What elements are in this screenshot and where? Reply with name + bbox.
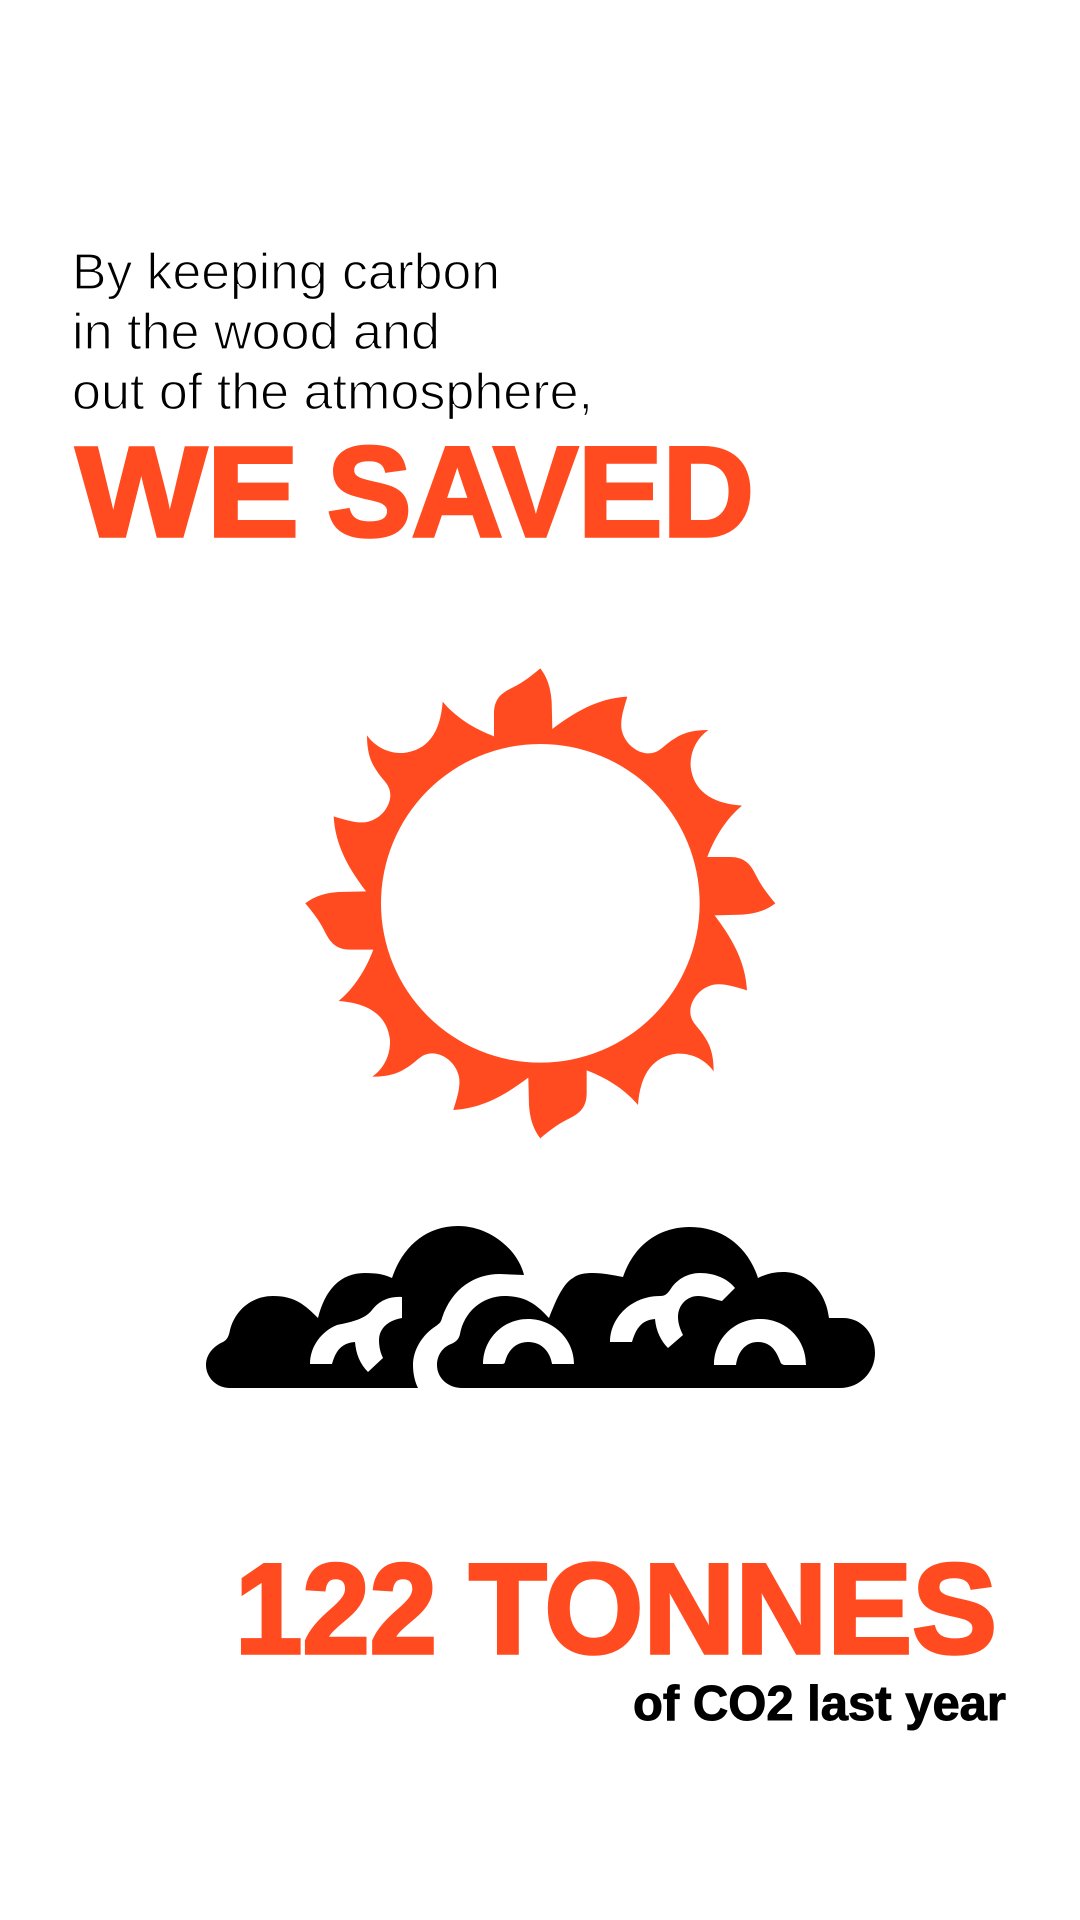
heading: we saved: SAVED xyxy=(327,421,754,564)
heading: we saved: WE xyxy=(76,421,299,564)
right cloud xyxy=(437,1227,875,1388)
headline number: 122 tonnes: TONNES xyxy=(469,1538,997,1681)
sun rays xyxy=(305,668,775,1138)
icon: smoke clouds xyxy=(206,1226,875,1388)
right cloud white arc 2 xyxy=(714,1319,806,1365)
intro line 1: By keeping carbon xyxy=(72,243,500,300)
intro line 3: out of the atmosphere, xyxy=(72,363,593,420)
sun white centre xyxy=(381,744,700,1063)
intro line 2: in the wood and xyxy=(72,303,440,360)
left cloud white swirl xyxy=(310,1297,402,1372)
right cloud white swirl xyxy=(610,1273,735,1348)
caption: of CO2 last year: of CO2 last year xyxy=(633,1677,1006,1731)
intro text block xyxy=(72,243,593,420)
left cloud xyxy=(206,1226,524,1388)
right cloud white arc 1 xyxy=(483,1319,574,1364)
icon: sun xyxy=(305,668,775,1138)
headline number: 122 tonnes: 122 xyxy=(235,1538,437,1681)
